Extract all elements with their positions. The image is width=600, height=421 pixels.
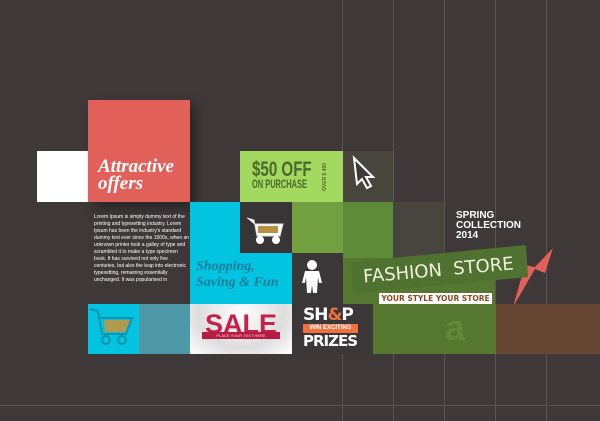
- heading: attractive offers: [97, 156, 174, 194]
- icon: person: [292, 253, 343, 304]
- green blocks: [292, 202, 343, 253]
- panel: sale: PLACE YOUR TEXT HERE: [216, 333, 266, 338]
- panel: $50 off: [240, 151, 343, 202]
- panel: shop prizes: SH&P: [303, 305, 353, 325]
- panel: $50 off: ON PURCHASE: [252, 177, 307, 191]
- panel: sale: SALE: [205, 309, 277, 339]
- text: spring collection: 2014: [456, 230, 478, 241]
- panel: shop prizes: WIN EXCITING: [310, 325, 351, 331]
- panel: $50 off: $50 OFF: [252, 158, 312, 181]
- green block bottom: [373, 304, 496, 354]
- panel: shop prizes: [292, 304, 373, 354]
- icon: cart: [240, 202, 292, 253]
- cyan block: [190, 202, 240, 253]
- panel: shopping saving fun: [190, 253, 292, 304]
- panel: shopping saving fun: Saving & Fun: [196, 275, 278, 290]
- panel: $50 off: OVER $ 400: [322, 163, 328, 191]
- panel: shop prizes: PRIZES: [303, 332, 357, 350]
- arrow: red: [514, 248, 553, 304]
- text: spring collection: SPRING: [456, 210, 494, 221]
- tag: your style: YOUR STYLE YOUR STORE: [381, 294, 490, 303]
- text block: lorem: Lorem Ipsum is simply dummy text of the printing and typesetting industry. Lorem Ipsum has been the industry's standard dummy text ever since the 1500s, when an unknown printer took a galley of type and scrambled it to make a type specimen book. It has survived not only five centuries, but also the leap into electronic typesetting, remaining essentially unchanged. It was popularised in: [94, 214, 189, 283]
- green block bottom: a: [445, 307, 465, 348]
- panel: attractive offers: [88, 100, 190, 202]
- heading: attractive offers: Attractive: [98, 156, 174, 177]
- text: spring collection: COLLECTION: [456, 220, 521, 231]
- icon: cart cyan: [88, 304, 139, 354]
- text: spring collection: [456, 210, 521, 241]
- heading: attractive offers: offers: [98, 173, 143, 194]
- panel: shopping saving fun: Shopping,: [196, 259, 255, 274]
- white block: [37, 151, 88, 202]
- banner: fashion store: FASHION STORE: [362, 253, 514, 288]
- brown block: [496, 304, 600, 354]
- panel: sale: [190, 304, 292, 354]
- icon: cursor: [343, 151, 393, 202]
